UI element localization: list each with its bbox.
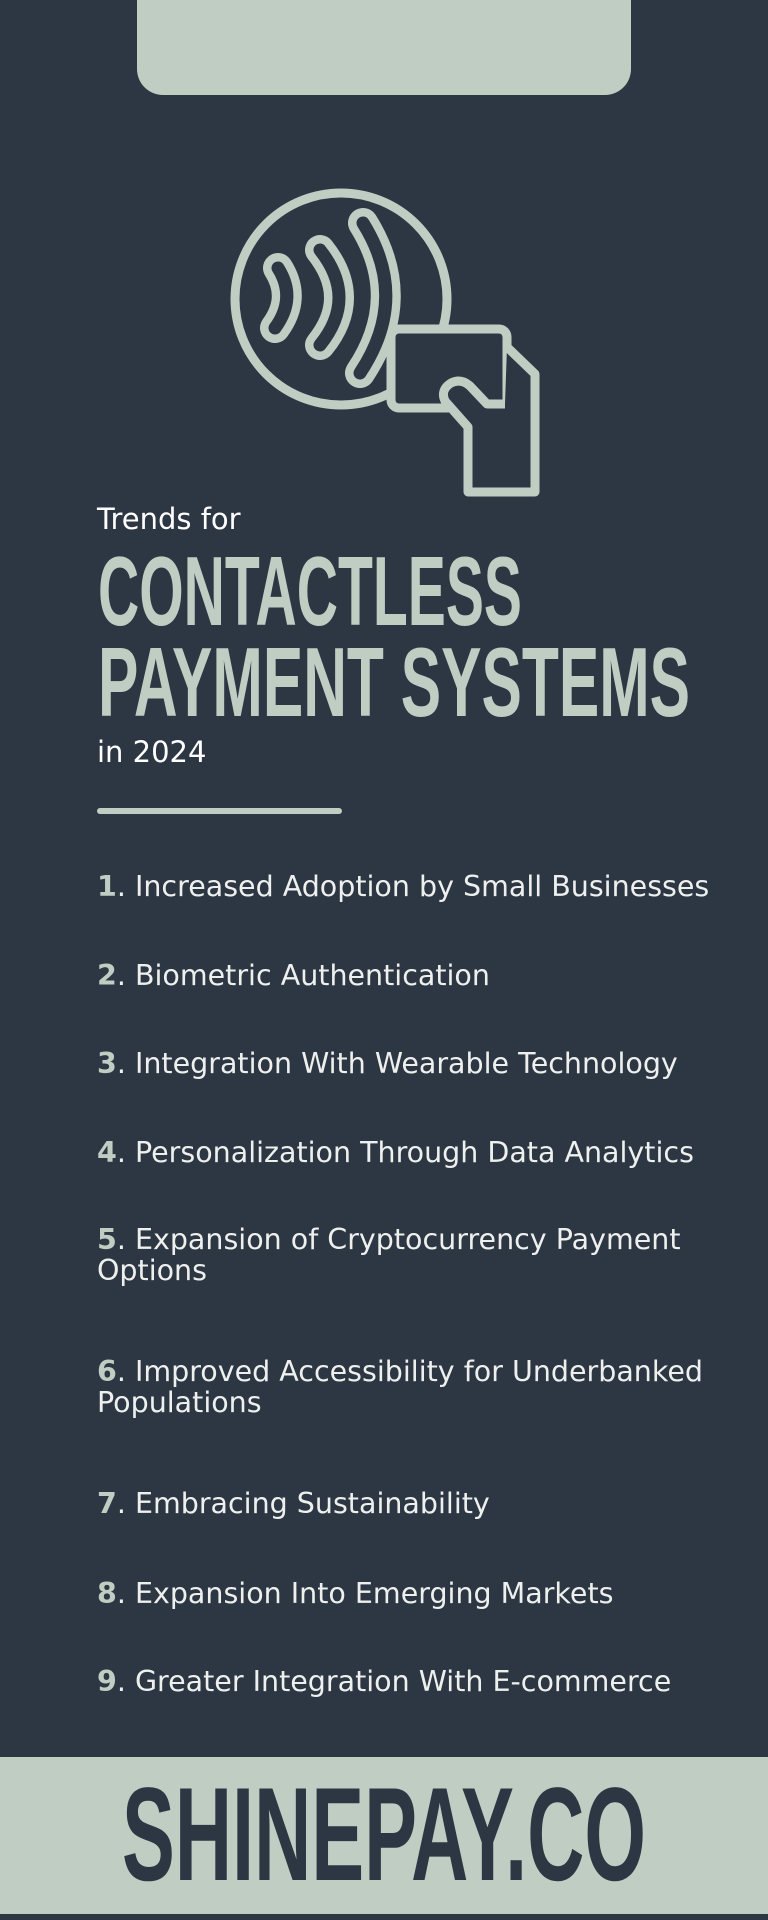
icon: contactless payment hand bbox=[230, 188, 540, 496]
item 6: Populations bbox=[97, 1386, 262, 1419]
item 5: 5. Expansion of Cryptocurrency Payment bbox=[97, 1223, 680, 1256]
divider line bbox=[97, 808, 342, 814]
item 7: 7. Embracing Sustainability bbox=[97, 1487, 490, 1520]
item 2: 2. Biometric Authentication bbox=[97, 959, 490, 992]
item 6 bbox=[97, 1355, 703, 1419]
item 5: Options bbox=[97, 1254, 207, 1287]
item 4: 4. Personalization Through Data Analytics bbox=[97, 1136, 694, 1169]
item 8: 8. Expansion Into Emerging Markets bbox=[97, 1577, 613, 1610]
item 5 bbox=[97, 1223, 680, 1287]
title bbox=[98, 540, 690, 730]
item 6: 6. Improved Accessibility for Underbanked bbox=[97, 1355, 703, 1388]
item 3: 3. Integration With Wearable Technology bbox=[97, 1047, 678, 1080]
top tab bbox=[137, 0, 631, 95]
list of trends bbox=[97, 870, 709, 1698]
subtitle: year: in 2024 bbox=[97, 735, 206, 769]
footer band bbox=[0, 1757, 768, 1914]
subtitle: trends for: Trends for bbox=[97, 502, 241, 536]
item 1: 1. Increased Adoption by Small Businesses bbox=[97, 870, 709, 903]
item 9: 9. Greater Integration With E-commerce bbox=[97, 1665, 671, 1698]
waves bbox=[275, 223, 386, 373]
